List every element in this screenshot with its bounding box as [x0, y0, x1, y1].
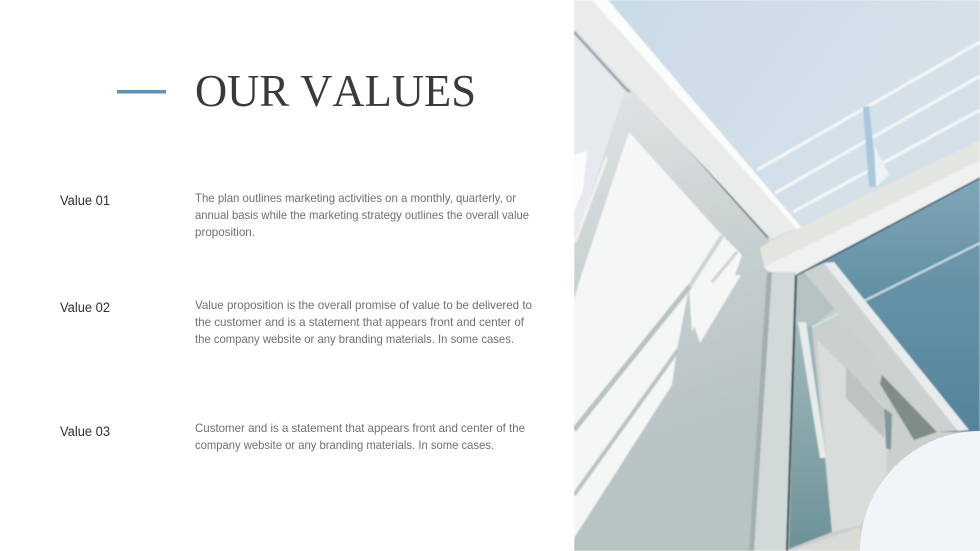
value 02 description: Value proposition is the overall promise of value to be delivered to — [195, 299, 532, 312]
value 02 description — [195, 299, 532, 346]
accent line — [117, 90, 166, 94]
value 01 label: Value 01 — [60, 193, 110, 208]
value 03 description: Customer and is a statement that appears front and center of the — [195, 422, 525, 435]
roof beam — [574, 0, 801, 238]
overhang beam — [760, 140, 980, 277]
value 01 description: annual basis while the marketing strategy outlines the overall value — [195, 209, 529, 222]
value 03 description: company website or any branding materials. In some cases. — [195, 439, 494, 452]
railing — [757, 42, 980, 212]
value 02 description: the company website or any branding materials. In some cases. — [195, 333, 514, 346]
building photo — [574, 0, 980, 551]
value 02 label: Value 02 — [60, 300, 110, 315]
concrete wall — [574, 28, 769, 551]
value 03 description — [195, 422, 525, 452]
value 03 label: Value 03 — [60, 424, 110, 439]
corner circle — [860, 431, 980, 551]
roof beam highlight — [592, 0, 801, 229]
value 02 description: the customer and is a statement that appears front and center of — [195, 316, 525, 329]
value 01 description — [195, 192, 529, 239]
value 01 description: The plan outlines marketing activities on a monthly, quarterly, or — [195, 192, 516, 205]
value 01 description: proposition. — [195, 226, 255, 239]
window glass — [787, 176, 980, 551]
title: OUR VALUES — [195, 65, 476, 116]
window frame — [749, 272, 861, 551]
